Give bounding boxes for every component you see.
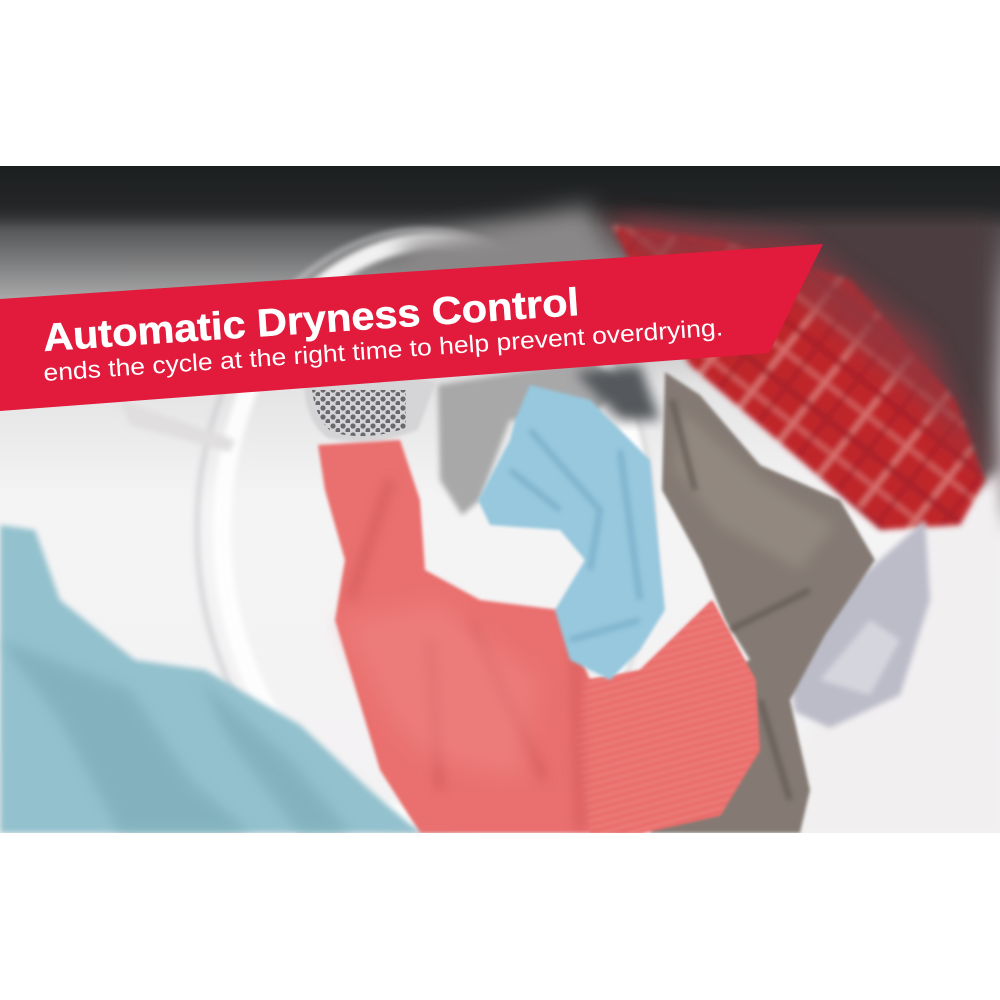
teal sleeve shading <box>0 640 350 833</box>
plaid blur overlay <box>605 215 990 480</box>
dark top band <box>0 180 1000 223</box>
infographic canvas <box>0 166 1000 833</box>
coral shirt folds <box>350 480 580 830</box>
blurred grey top fabric <box>389 193 614 267</box>
grey-brown sweater <box>650 372 875 833</box>
blue shirt folds <box>510 430 640 640</box>
teal sleeve lower left <box>0 525 420 833</box>
banner heading: Automatic Dryness Control <box>42 281 580 360</box>
lower right white drum <box>970 466 1000 532</box>
lint screen <box>304 375 436 442</box>
red plaid pillow <box>612 225 985 530</box>
coral shirt <box>318 440 760 833</box>
shaded right corner <box>654 220 1000 528</box>
banner shape <box>0 244 823 411</box>
photo: clothes tumbling in dryer drum <box>0 166 1000 833</box>
drum door ring <box>197 230 653 830</box>
light blue shirt <box>478 385 665 680</box>
sweater dark folds <box>672 400 810 800</box>
coral highlight <box>336 610 530 768</box>
pale lavender cloth <box>790 520 930 728</box>
grey shirt <box>438 360 620 515</box>
banner <box>0 244 823 411</box>
banner subtext: ends the cycle at the right time to help prevent overdrying. <box>43 314 724 387</box>
dark shadow behind blue shirt <box>575 365 660 420</box>
coral knit texture <box>575 602 758 833</box>
drum background <box>0 166 1000 833</box>
sweater light fold <box>677 420 828 564</box>
left white paddle streak <box>126 407 236 452</box>
